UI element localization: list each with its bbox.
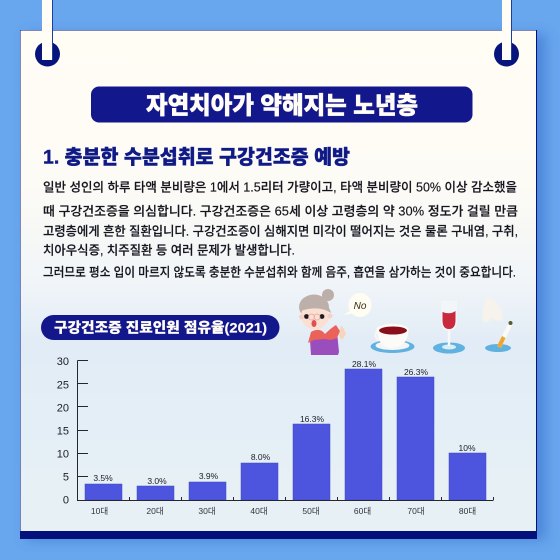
- icon: left hanging ring: [35, 0, 60, 66]
- category labels: 20대: [146, 506, 164, 516]
- value labels: 26.3%: [404, 367, 428, 377]
- value labels: [93, 359, 476, 486]
- category labels: 50대: [302, 506, 320, 516]
- value labels: 3.9%: [199, 471, 219, 481]
- value labels: 3.0%: [147, 476, 167, 486]
- value labels: 3.5%: [93, 473, 113, 483]
- bar chart: [57, 356, 494, 516]
- category labels: 60대: [354, 506, 371, 516]
- text block: body paragraph: [43, 180, 518, 280]
- text block: body paragraph: 그러므로 평소 입이 마르지 않도록 충분한 수분섭취와 함께 음주, 흡연을 삼가하는 것이 중요합니다.: [43, 264, 516, 280]
- text block: body paragraph: 고령층에게 흔한 질환입니다. 구강건조증이 심해지면 미각이 떨어지는 것은 물론 구내염, 구취,: [43, 224, 518, 238]
- category labels: 70대: [407, 506, 425, 516]
- y axis labels: 5: [63, 472, 69, 484]
- title: 자연치아가 약해지는 노년층: [146, 92, 418, 120]
- category labels: 40대: [250, 506, 268, 516]
- chart title pill: 구강건조증 진료인원 점유율(2021): [54, 320, 267, 336]
- icon: speech bubble "No": [344, 293, 372, 317]
- axes: [78, 360, 494, 500]
- text block: body paragraph: 일반 성인의 하루 타액 분비량은 1에서 1.5리터 가량이고, 타액 분비량이 50% 이상 감소했을: [43, 180, 517, 194]
- value labels: 16.3%: [300, 414, 324, 424]
- y axis labels: 0: [63, 494, 69, 506]
- chart title pill: [41, 315, 280, 340]
- heading: 1. 충분한 수분섭취로 구강건조증 예방: [43, 146, 350, 168]
- category labels: 10대: [91, 506, 108, 516]
- y axis labels: 20: [57, 402, 69, 414]
- value labels: 10%: [458, 443, 476, 453]
- y axis labels: 15: [57, 426, 69, 438]
- y axis labels: 30: [57, 356, 69, 368]
- y axis labels: [57, 356, 69, 506]
- icon: coffee cup: [370, 324, 414, 353]
- text block: body paragraph: 치아우식증, 치주질환 등 여러 문제가 발생합니다.: [43, 242, 295, 258]
- value labels: 28.1%: [352, 359, 376, 369]
- icon: cigarette and smoke: [482, 298, 512, 352]
- value labels: 8.0%: [251, 452, 271, 462]
- title: [91, 86, 472, 122]
- category labels: 80대: [459, 506, 476, 516]
- icon: speech bubble "No": No: [354, 301, 367, 312]
- category labels: [91, 506, 476, 516]
- bars: [85, 369, 486, 500]
- icon: wine glass: [433, 301, 465, 354]
- y axis labels: 10: [57, 448, 69, 460]
- y axis labels: 25: [57, 380, 69, 392]
- text block: body paragraph: 때 구강건조증을 의심합니다. 구강건조증은 65세 이상 고령층의 약 30% 정도가 걸릴 만큼: [43, 204, 518, 218]
- icon: grandmother saying no: [299, 289, 346, 355]
- category labels: 30대: [198, 506, 216, 516]
- icon: right hanging ring: [494, 0, 519, 66]
